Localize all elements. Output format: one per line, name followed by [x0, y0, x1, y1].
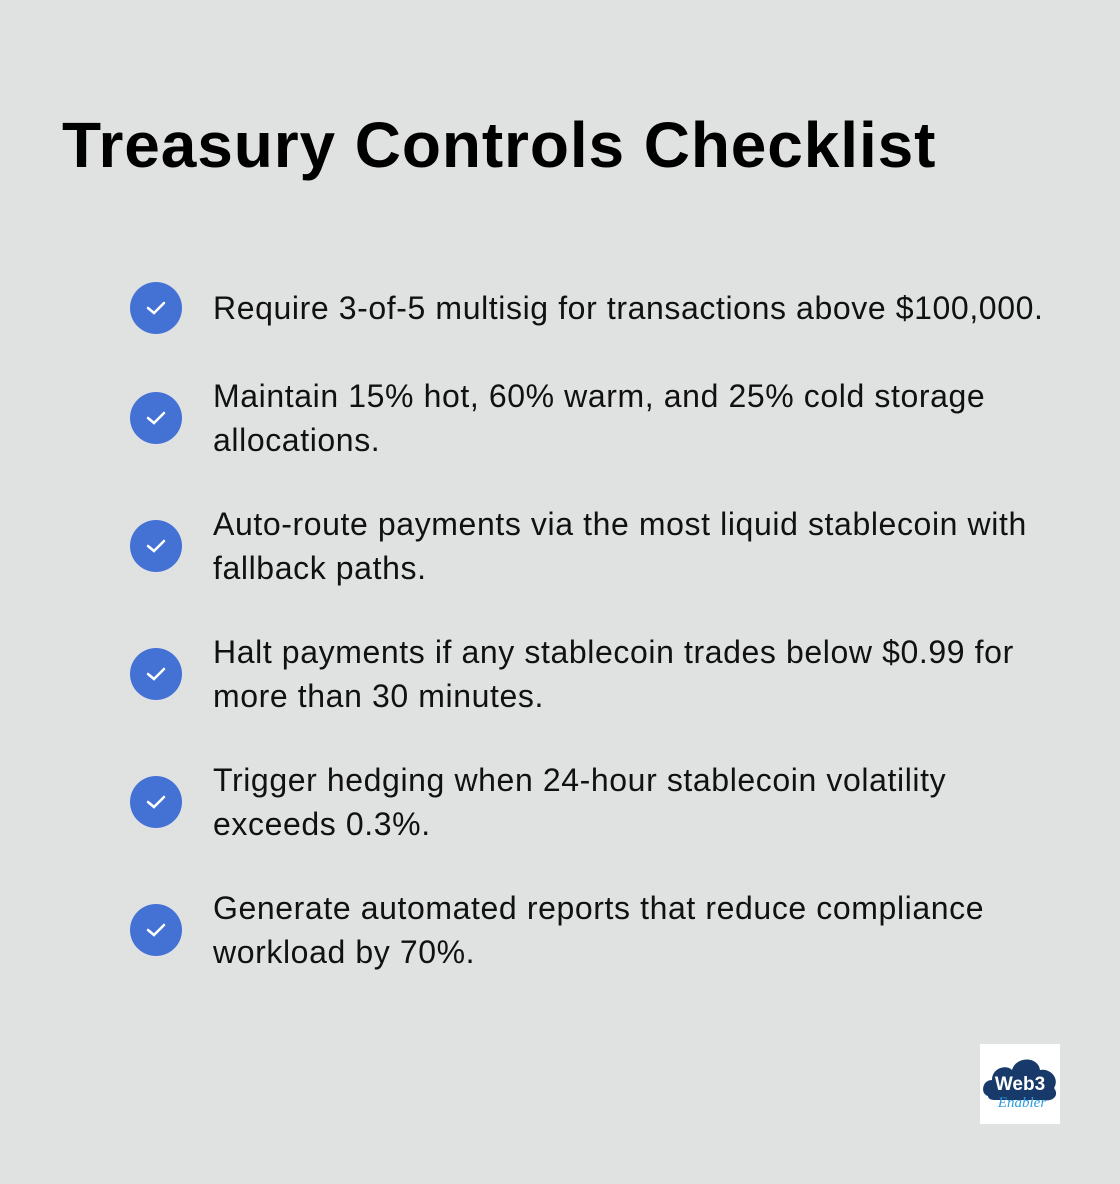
text: Auto-route payments via the most liquid stablecoin with fallback paths. — [213, 506, 1027, 586]
icon: check — [130, 776, 182, 828]
text: Generate automated reports that reduce compliance — [213, 890, 984, 926]
text — [213, 762, 946, 842]
text — [213, 890, 984, 970]
icon: check — [130, 904, 182, 956]
icon: check — [130, 648, 182, 700]
item 5 — [130, 762, 946, 842]
item 2 — [130, 378, 985, 458]
icon: check — [130, 392, 182, 444]
item 3 — [130, 506, 1027, 586]
title: Treasury Controls Checklist — [62, 109, 936, 181]
item 4 — [130, 634, 1014, 714]
text: exceeds 0.3%. — [213, 806, 431, 842]
text — [213, 634, 1014, 714]
logo: Enabler — [997, 1095, 1046, 1111]
text: Require 3-of-5 multisig for transactions above $100,000. — [213, 290, 1044, 326]
text: workload by 70%. — [213, 934, 475, 970]
item 1 — [130, 282, 1044, 334]
text: Halt payments if any stablecoin trades below $0.99 for — [213, 634, 1014, 670]
icon: check — [130, 520, 182, 572]
item 6 — [130, 890, 984, 970]
icon: check — [130, 282, 182, 334]
text: Maintain 15% hot, 60% warm, and 25% cold storage allocations. — [213, 378, 985, 458]
text: Trigger hedging when 24-hour stablecoin volatility — [213, 762, 946, 798]
text: more than 30 minutes. — [213, 678, 544, 714]
logo: Web3 — [995, 1074, 1045, 1095]
logo — [980, 1044, 1060, 1124]
